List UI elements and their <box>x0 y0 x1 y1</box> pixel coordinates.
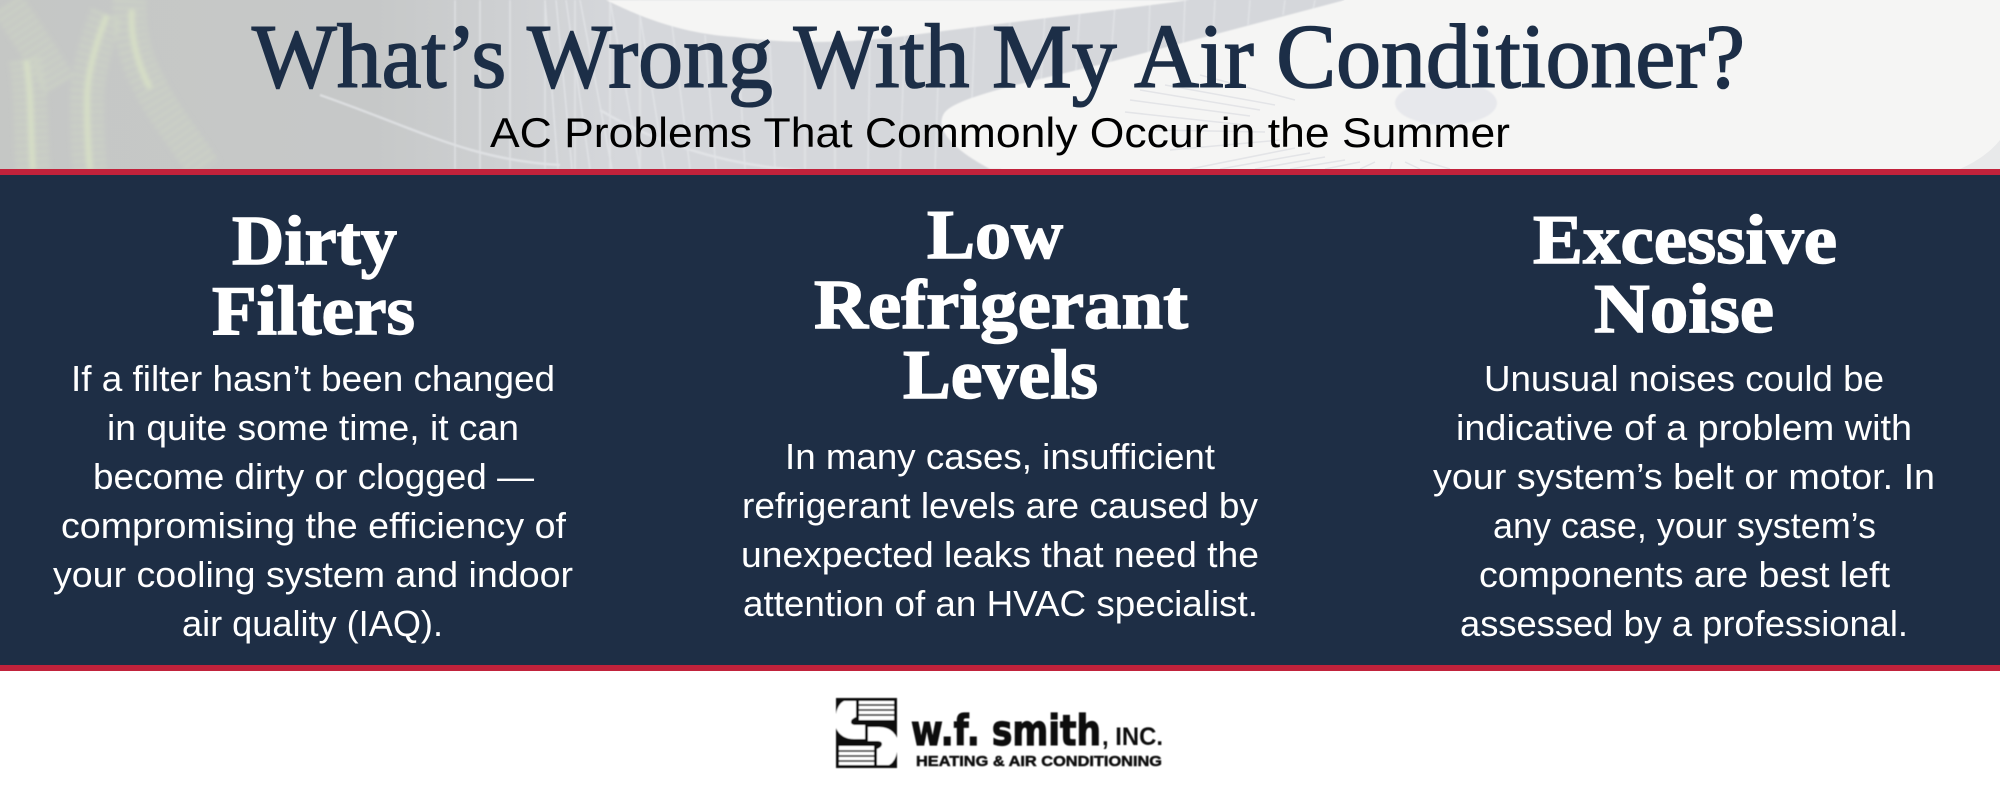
plants <box>21 8 154 169</box>
body text: low refrigerant: attention of an HVAC specialist. <box>743 583 1258 624</box>
body text: low refrigerant <box>741 436 1259 624</box>
title: What’s Wrong With My Air Conditioner? <box>252 6 1745 107</box>
logo tagline: HEATING & AIR CONDITIONING <box>916 753 1162 770</box>
body text: dirty filters: compromising the efficiency of <box>61 505 567 546</box>
icon: S-shaped logo mark <box>836 698 897 768</box>
column: dirty filters <box>53 203 573 644</box>
header background photo: faded AC unit and plants <box>0 0 2000 170</box>
subtitle: AC Problems That Commonly Occur in the Summer <box>490 109 1510 156</box>
heading: Dirty Filters <box>212 203 415 350</box>
body text: excessive noise: Unusual noises could be <box>1484 358 1884 399</box>
heading: Excessive Noise: Noise <box>1594 271 1774 348</box>
body text: dirty filters <box>53 358 573 644</box>
heading: Low Refrigerant Levels: Levels <box>903 337 1098 414</box>
body text: low refrigerant: In many cases, insufficient <box>785 436 1215 477</box>
body text: dirty filters: become dirty or clogged — <box>93 456 534 497</box>
body text: dirty filters: in quite some time, it can <box>107 407 519 448</box>
heading: Low Refrigerant Levels: Low <box>927 197 1063 274</box>
top red rule <box>0 169 2000 175</box>
bottom red rule <box>0 665 2000 671</box>
body text: dirty filters: your cooling system and indoor <box>53 554 573 595</box>
heading: Dirty Filters: Filters <box>212 273 415 350</box>
navy panel <box>0 175 2000 665</box>
body text: dirty filters: If a filter hasn’t been changed <box>71 358 555 399</box>
body text: excessive noise: indicative of a problem with <box>1456 407 1912 448</box>
heading: Excessive Noise: Excessive <box>1533 202 1837 279</box>
column: excessive noise <box>1433 202 1935 644</box>
heading: Low Refrigerant Levels: Refrigerant <box>814 267 1188 344</box>
logo suffix: , INC. <box>1102 723 1163 751</box>
unit top lid <box>606 0 1190 42</box>
body text: excessive noise <box>1433 358 1935 644</box>
logo: w.f. smith <box>836 698 1163 770</box>
body text: excessive noise: components are best left <box>1479 554 1890 595</box>
heading: Low Refrigerant Levels <box>814 197 1188 414</box>
body text: excessive noise: your system’s belt or motor. In <box>1433 456 1935 497</box>
logo wordmark: w.f. smith <box>911 706 1101 755</box>
fan plate <box>941 0 1344 169</box>
heading: Dirty Filters: Dirty <box>232 203 397 280</box>
body text: low refrigerant: refrigerant levels are caused by <box>742 485 1258 526</box>
heading: Excessive Noise <box>1533 202 1837 348</box>
body text: excessive noise: assessed by a professional. <box>1460 603 1908 644</box>
column: low refrigerant levels <box>741 197 1259 624</box>
body text: excessive noise: any case, your system’s <box>1493 505 1876 546</box>
body text: low refrigerant: unexpected leaks that need the <box>741 534 1259 575</box>
body text: dirty filters: air quality (IAQ). <box>182 603 443 644</box>
